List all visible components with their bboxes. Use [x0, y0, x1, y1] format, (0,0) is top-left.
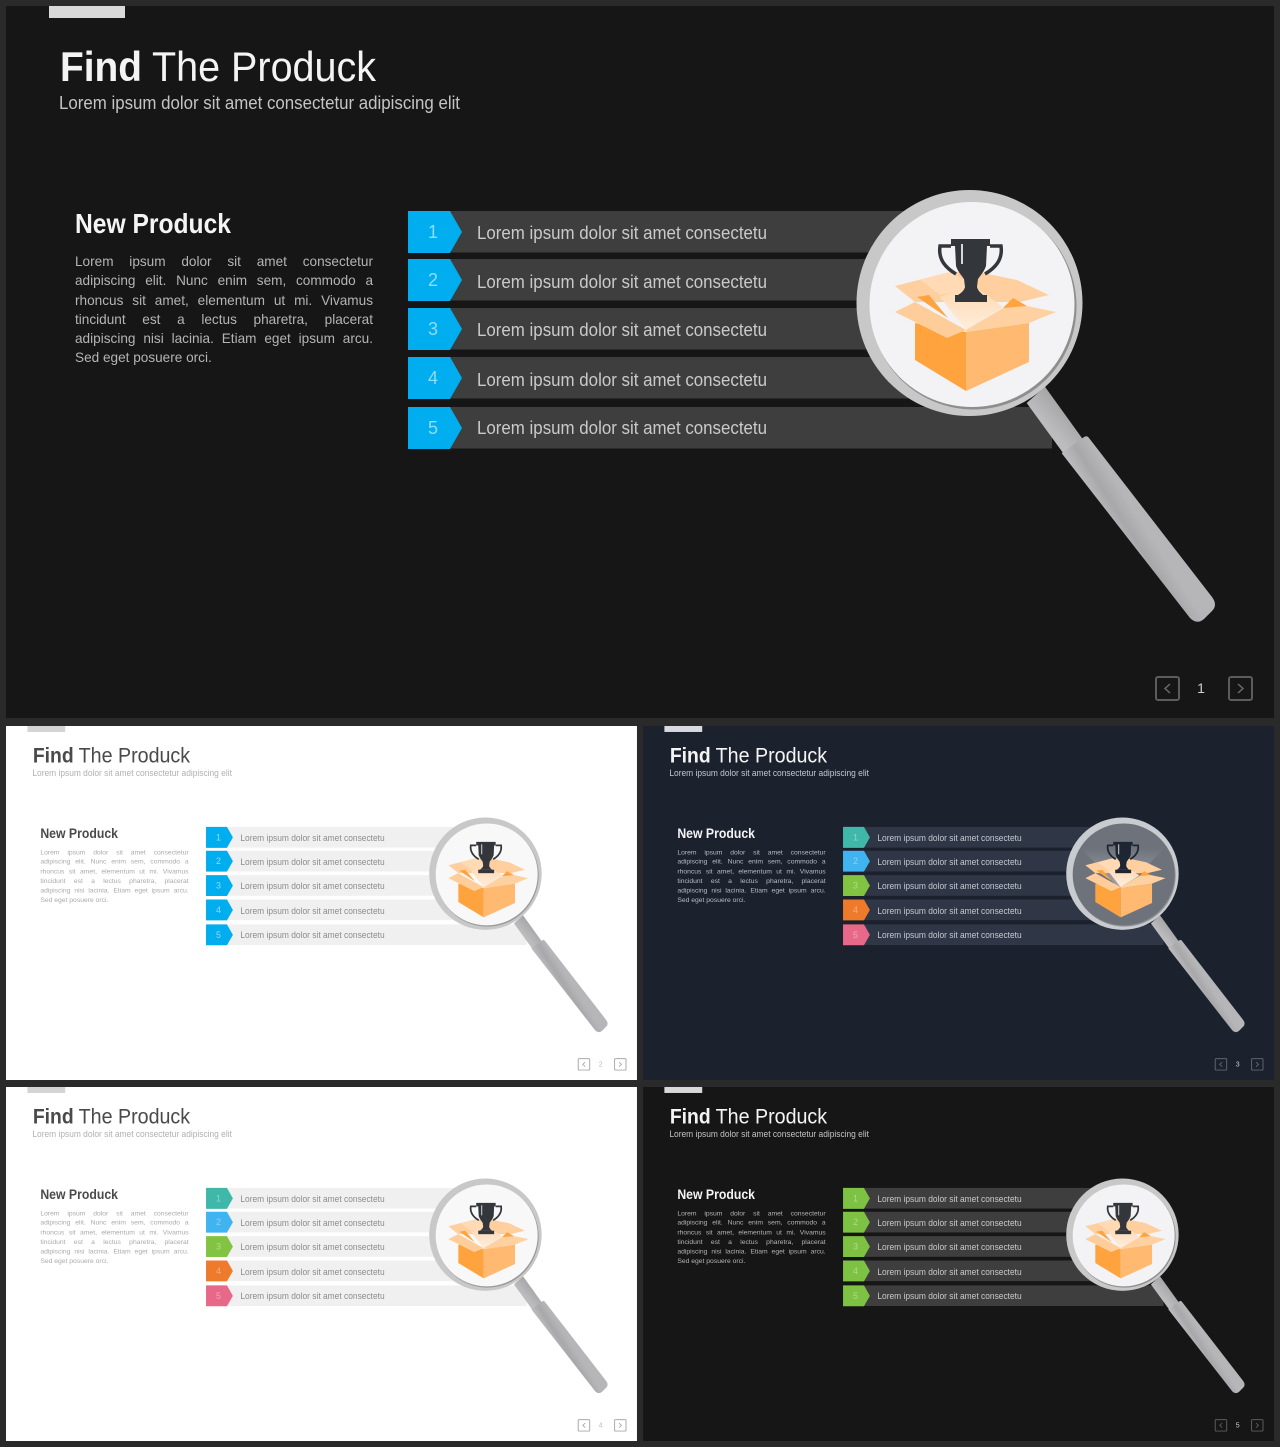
list of five rows: Lorem ipsum dolor sit amet consectetu — [877, 1242, 1022, 1252]
slide 1: large dark slide — [6, 6, 1274, 718]
list of five rows: Lorem ipsum dolor sit amet consectetu — [477, 320, 767, 340]
heading: New Produck: New Produck — [75, 208, 231, 239]
body text: tincidunt est a lectus pharetra, placerat — [75, 312, 373, 327]
subtitle: Lorem ipsum dolor sit amet consectetur adipiscing elit — [669, 1129, 869, 1139]
list of five rows: Lorem ipsum dolor sit amet consectetu — [877, 930, 1022, 940]
list of five rows — [843, 1188, 1163, 1306]
list of five rows: Lorem ipsum dolor sit amet consectetu — [477, 370, 767, 390]
list of five rows: 4 — [853, 1266, 858, 1276]
body text: adipiscing nisi lacinia. Etiam eget ipsum arcu. — [40, 1248, 189, 1255]
title: The Produck — [79, 1105, 191, 1128]
pagination — [578, 1420, 626, 1431]
heading: New Produck: New Produck — [40, 825, 118, 841]
title — [670, 744, 828, 767]
body text: adipiscing elit. Nunc enim sem, commodo a — [677, 858, 826, 865]
icon: magnifier with box and trophy — [856, 190, 1215, 622]
icon: magnifier with box and trophy — [1066, 1178, 1245, 1393]
list of five rows: Lorem ipsum dolor sit amet consectetu — [477, 272, 767, 292]
body text: Sed eget posuere orci. — [75, 350, 212, 365]
list of five rows: Lorem ipsum dolor sit amet consectetu — [240, 1242, 385, 1252]
pagination — [1215, 1059, 1263, 1070]
pagination: 3 — [1236, 1062, 1240, 1069]
list of five rows: Lorem ipsum dolor sit amet consectetu — [240, 930, 385, 940]
subtitle: Lorem ipsum dolor sit amet consectetur adipiscing elit — [32, 1129, 232, 1139]
pagination — [1156, 677, 1252, 700]
body text — [677, 847, 827, 907]
title: Find — [33, 744, 74, 767]
body text: rhoncus sit amet, elementum ut mi. Vivamus — [677, 868, 826, 875]
list of five rows: 1 — [216, 832, 221, 842]
list of five rows: Lorem ipsum dolor sit amet consectetu — [877, 1267, 1022, 1277]
list of five rows: Lorem ipsum dolor sit amet consectetu — [240, 857, 385, 867]
body text: adipiscing nisi lacinia. Etiam eget ipsum arcu. — [75, 331, 373, 346]
list of five rows: 1 — [216, 1193, 221, 1203]
title: Find — [60, 43, 142, 90]
body text: adipiscing elit. Nunc enim sem, commodo a — [75, 273, 373, 288]
list of five rows: 3 — [216, 881, 221, 891]
slide 5: dark slide, green arrows — [643, 1087, 1274, 1441]
pagination: 1 — [1197, 680, 1205, 696]
list of five rows: Lorem ipsum dolor sit amet consectetu — [240, 1267, 385, 1277]
list of five rows: 3 — [216, 1242, 221, 1252]
heading: New Produck: New Produck — [677, 1186, 755, 1202]
body text: Lorem ipsum dolor sit amet consectetur — [40, 1209, 189, 1217]
list of five rows: Lorem ipsum dolor sit amet consectetu — [477, 223, 767, 243]
list of five rows: 4 — [853, 905, 858, 915]
body text — [40, 1208, 190, 1268]
list of five rows: 2 — [853, 1217, 858, 1227]
title: The Produck — [152, 43, 377, 90]
title — [33, 1105, 191, 1128]
title — [60, 43, 377, 90]
body text: Lorem ipsum dolor sit amet consectetur — [677, 1209, 826, 1217]
title: The Produck — [716, 1105, 828, 1128]
list of five rows: Lorem ipsum dolor sit amet consectetu — [877, 881, 1022, 891]
title — [33, 744, 191, 767]
list of five rows: Lorem ipsum dolor sit amet consectetu — [877, 1194, 1022, 1204]
list of five rows: 2 — [216, 1217, 221, 1227]
list of five rows: Lorem ipsum dolor sit amet consectetu — [877, 906, 1022, 916]
list of five rows: 1 — [428, 222, 438, 242]
list of five rows: Lorem ipsum dolor sit amet consectetu — [877, 857, 1022, 867]
body text — [40, 847, 190, 907]
pagination: 4 — [599, 1423, 603, 1430]
list of five rows: Lorem ipsum dolor sit amet consectetu — [240, 1291, 385, 1301]
list of five rows: 2 — [428, 270, 438, 290]
subtitle: Lorem ipsum dolor sit amet consectetur adipiscing elit — [669, 768, 869, 778]
icon: magnifier with box and trophy — [429, 1178, 608, 1393]
body text: tincidunt est a lectus pharetra, placerat — [677, 1238, 826, 1246]
body text — [677, 1208, 827, 1268]
subtitle: Lorem ipsum dolor sit amet consectetur adipiscing elit — [59, 93, 460, 113]
list of five rows: Lorem ipsum dolor sit amet consectetu — [877, 1218, 1022, 1228]
list of five rows: 4 — [428, 368, 438, 388]
title: Find — [670, 1105, 711, 1128]
list of five rows: 3 — [853, 881, 858, 891]
heading: New Produck: New Produck — [40, 1186, 118, 1202]
list of five rows: 5 — [853, 930, 858, 940]
body text: Lorem ipsum dolor sit amet consectetur — [40, 848, 189, 856]
body text: adipiscing elit. Nunc enim sem, commodo a — [40, 858, 189, 865]
body text: rhoncus sit amet, elementum ut mi. Vivamus — [75, 293, 373, 308]
body text: rhoncus sit amet, elementum ut mi. Vivamus — [677, 1229, 826, 1236]
list of five rows: Lorem ipsum dolor sit amet consectetu — [877, 833, 1022, 843]
list of five rows: 3 — [428, 319, 438, 339]
body text: Sed eget posuere orci. — [40, 896, 108, 904]
list of five rows: 2 — [216, 856, 221, 866]
icon: magnifier with box and trophy — [429, 817, 608, 1032]
list of five rows — [206, 827, 526, 945]
title: The Produck — [79, 744, 191, 767]
list of five rows: Lorem ipsum dolor sit amet consectetu — [240, 1194, 385, 1204]
title: Find — [670, 744, 711, 767]
body text: tincidunt est a lectus pharetra, placerat — [40, 877, 189, 885]
body text: adipiscing nisi lacinia. Etiam eget ipsum arcu. — [677, 887, 826, 894]
body text: Sed eget posuere orci. — [677, 1257, 745, 1265]
list of five rows: Lorem ipsum dolor sit amet consectetu — [240, 906, 385, 916]
pagination — [578, 1059, 626, 1070]
subtitle: Lorem ipsum dolor sit amet consectetur adipiscing elit — [32, 768, 232, 778]
list of five rows — [843, 827, 1163, 945]
body text: adipiscing elit. Nunc enim sem, commodo a — [40, 1219, 189, 1226]
body text: tincidunt est a lectus pharetra, placerat — [677, 877, 826, 885]
body text: adipiscing elit. Nunc enim sem, commodo a — [677, 1219, 826, 1226]
slide 3: navy slide, multicolour arrows — [643, 726, 1274, 1080]
body text: adipiscing nisi lacinia. Etiam eget ipsum arcu. — [40, 887, 189, 894]
list of five rows: Lorem ipsum dolor sit amet consectetu — [477, 418, 767, 438]
list of five rows: 1 — [853, 1193, 858, 1203]
list of five rows: 5 — [853, 1291, 858, 1301]
title: Find — [33, 1105, 74, 1128]
pagination: 2 — [599, 1062, 603, 1069]
body text: rhoncus sit amet, elementum ut mi. Vivamus — [40, 1229, 189, 1236]
slide 4: white slide, multicolour arrows — [6, 1087, 637, 1441]
list of five rows: 1 — [853, 832, 858, 842]
pagination: 5 — [1236, 1423, 1240, 1430]
body text — [75, 252, 375, 372]
slide 2: white slide, blue arrows — [6, 726, 637, 1080]
body text: adipiscing nisi lacinia. Etiam eget ipsum arcu. — [677, 1248, 826, 1255]
body text: rhoncus sit amet, elementum ut mi. Vivamus — [40, 868, 189, 875]
list of five rows: 5 — [216, 1291, 221, 1301]
list of five rows — [408, 211, 1052, 449]
body text: Lorem ipsum dolor sit amet consectetur — [677, 848, 826, 856]
list of five rows: 5 — [428, 418, 438, 438]
list of five rows: 5 — [216, 930, 221, 940]
list of five rows: Lorem ipsum dolor sit amet consectetu — [240, 833, 385, 843]
icon: magnifier with box and trophy on grey lens — [1066, 817, 1245, 1032]
body text: Sed eget posuere orci. — [40, 1257, 108, 1265]
list of five rows — [206, 1188, 526, 1306]
list of five rows: Lorem ipsum dolor sit amet consectetu — [240, 1218, 385, 1228]
body text: Lorem ipsum dolor sit amet consectetur — [75, 254, 373, 269]
pagination — [1215, 1420, 1263, 1431]
title: The Produck — [716, 744, 828, 767]
list of five rows: 4 — [216, 1266, 221, 1276]
list of five rows: 4 — [216, 905, 221, 915]
list of five rows: 2 — [853, 856, 858, 866]
title — [670, 1105, 828, 1128]
list of five rows: Lorem ipsum dolor sit amet consectetu — [240, 881, 385, 891]
body text: tincidunt est a lectus pharetra, placerat — [40, 1238, 189, 1246]
heading: New Produck: New Produck — [677, 825, 755, 841]
list of five rows: 3 — [853, 1242, 858, 1252]
list of five rows: Lorem ipsum dolor sit amet consectetu — [877, 1291, 1022, 1301]
body text: Sed eget posuere orci. — [677, 896, 745, 904]
